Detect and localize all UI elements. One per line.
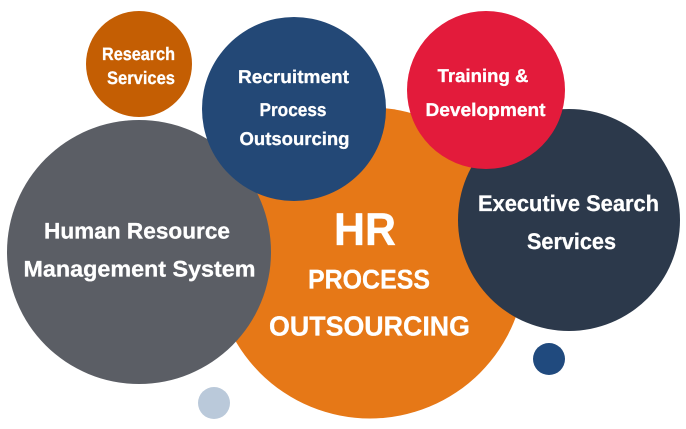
bubble: Research Services [86, 11, 192, 117]
bubble: Recruitment Process Outsourcing [202, 17, 386, 201]
bubble: Recruitment Process Outsourcing: Outsourcing [240, 128, 350, 149]
bubble: Executive Search Services [458, 109, 680, 331]
bubble: Research Services: Research [102, 44, 175, 64]
bubble: Training & Development: Training & [438, 65, 528, 86]
bubble: Human Resource Management System [7, 120, 271, 384]
bubble: Training & Development [407, 11, 565, 169]
decorative dot: light blue [198, 387, 230, 419]
central bubble: HR Process Outsourcing: HR [334, 203, 396, 255]
decorative dot: dark blue [533, 343, 565, 375]
central bubble: HR Process Outsourcing: PROCESS [308, 264, 430, 294]
bubble: Research Services: Services [107, 68, 175, 88]
bubble: Human Resource Management System: Human Resource [44, 218, 230, 244]
central bubble: HR Process Outsourcing [214, 108, 526, 418]
bubble: Human Resource Management System: Management System [24, 256, 256, 282]
bubble: Executive Search Services: Executive Search [478, 191, 659, 216]
bubble: Training & Development: Development [426, 99, 546, 120]
bubble: Recruitment Process Outsourcing: Recruitment [238, 66, 349, 87]
bubble: Executive Search Services: Services [527, 229, 616, 254]
central bubble: HR Process Outsourcing: OUTSOURCING [269, 310, 470, 342]
bubble: Recruitment Process Outsourcing: Process [260, 99, 326, 120]
